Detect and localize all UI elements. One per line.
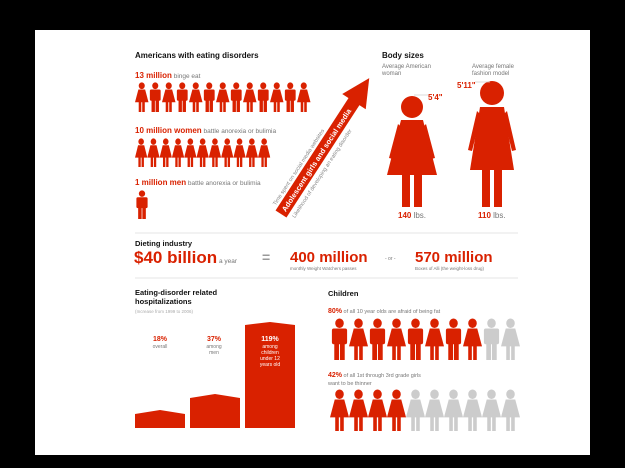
panel: children [327, 289, 520, 431]
stat 42%: want to be thinner [327, 381, 372, 387]
label 18%: 18% [153, 336, 168, 343]
panel: body sizes [381, 51, 516, 220]
heading: hospitalizations [135, 297, 192, 306]
arrow: adolescent girls and social media: Likelihood of developing an eating disorder [292, 128, 354, 219]
icons row 42% [330, 390, 520, 431]
label: average american woman: woman [381, 71, 401, 77]
arrow: adolescent girls and social media [269, 71, 383, 223]
stat: 13 million: 13 million binge eat [135, 71, 201, 80]
label 119%: years old [260, 362, 280, 368]
weight 140: 140 lbs. [398, 211, 426, 220]
icons row 80% [332, 319, 520, 360]
stat $40 billion: $40 billion a year [134, 248, 238, 267]
arrow: adolescent girls and social media: Adolescent girls and social media [280, 106, 354, 213]
heading: Dieting industry [135, 239, 193, 248]
stat 570 million: Boxes of Alli (the weight-loss drug) [415, 266, 485, 271]
label 37%: men [209, 350, 219, 356]
panel: dieting industry [134, 239, 493, 271]
label: fashion model: fashion model [472, 71, 509, 77]
subtitle: (Increase from 1999 to 2006) [135, 309, 194, 314]
heading: Americans with eating disorders [135, 51, 259, 60]
figure: model [468, 81, 516, 207]
or: - or - [385, 256, 396, 262]
stat 400 million: 400 million [290, 249, 368, 266]
panel: americans with eating disorders [135, 51, 310, 219]
heading: Body sizes [382, 51, 424, 60]
label: fashion model: Average female [472, 64, 515, 70]
equals: = [262, 249, 270, 265]
label 18%: overall [153, 344, 167, 350]
icons row women [135, 138, 270, 167]
heading: Eating-disorder related [135, 288, 218, 297]
height 5'11": 5'11" [457, 81, 476, 90]
stat 570 million: 570 million [415, 249, 493, 266]
heading: Children [328, 289, 359, 298]
stat: 1 million men: 1 million men battle anorexia or bulimia [135, 178, 261, 187]
stat 80%: 80% of all 10 year olds are afraid of being fat [328, 308, 441, 315]
weight 110: 110 lbs. [478, 211, 506, 220]
label: average american woman: Average American [382, 64, 431, 70]
bar chart [135, 322, 295, 428]
label 119%: under 12 [260, 356, 280, 362]
label 119%: among [262, 344, 278, 350]
icon: man [136, 190, 148, 219]
stat: 10 million women: 10 million women battle anorexia or bulimia [135, 126, 277, 135]
label 37%: 37% [207, 336, 222, 343]
panel: hospitalizations [135, 288, 295, 428]
stat 400 million: monthly Weight Watchers passes [290, 266, 357, 271]
arrow: adolescent girls and social media: Time spent on social media websites [272, 128, 326, 207]
figure: average woman [387, 96, 437, 207]
height 5'11" [457, 81, 490, 90]
label 37%: among [206, 344, 222, 350]
icons row 13 [135, 82, 310, 112]
label 119%: children [261, 350, 279, 356]
height 5'4" [414, 93, 443, 102]
stat 42%: 42% of all 1st through 3rd grade girls [328, 372, 421, 379]
label 119%: 119% [261, 336, 280, 343]
height 5'4": 5'4" [428, 93, 443, 102]
